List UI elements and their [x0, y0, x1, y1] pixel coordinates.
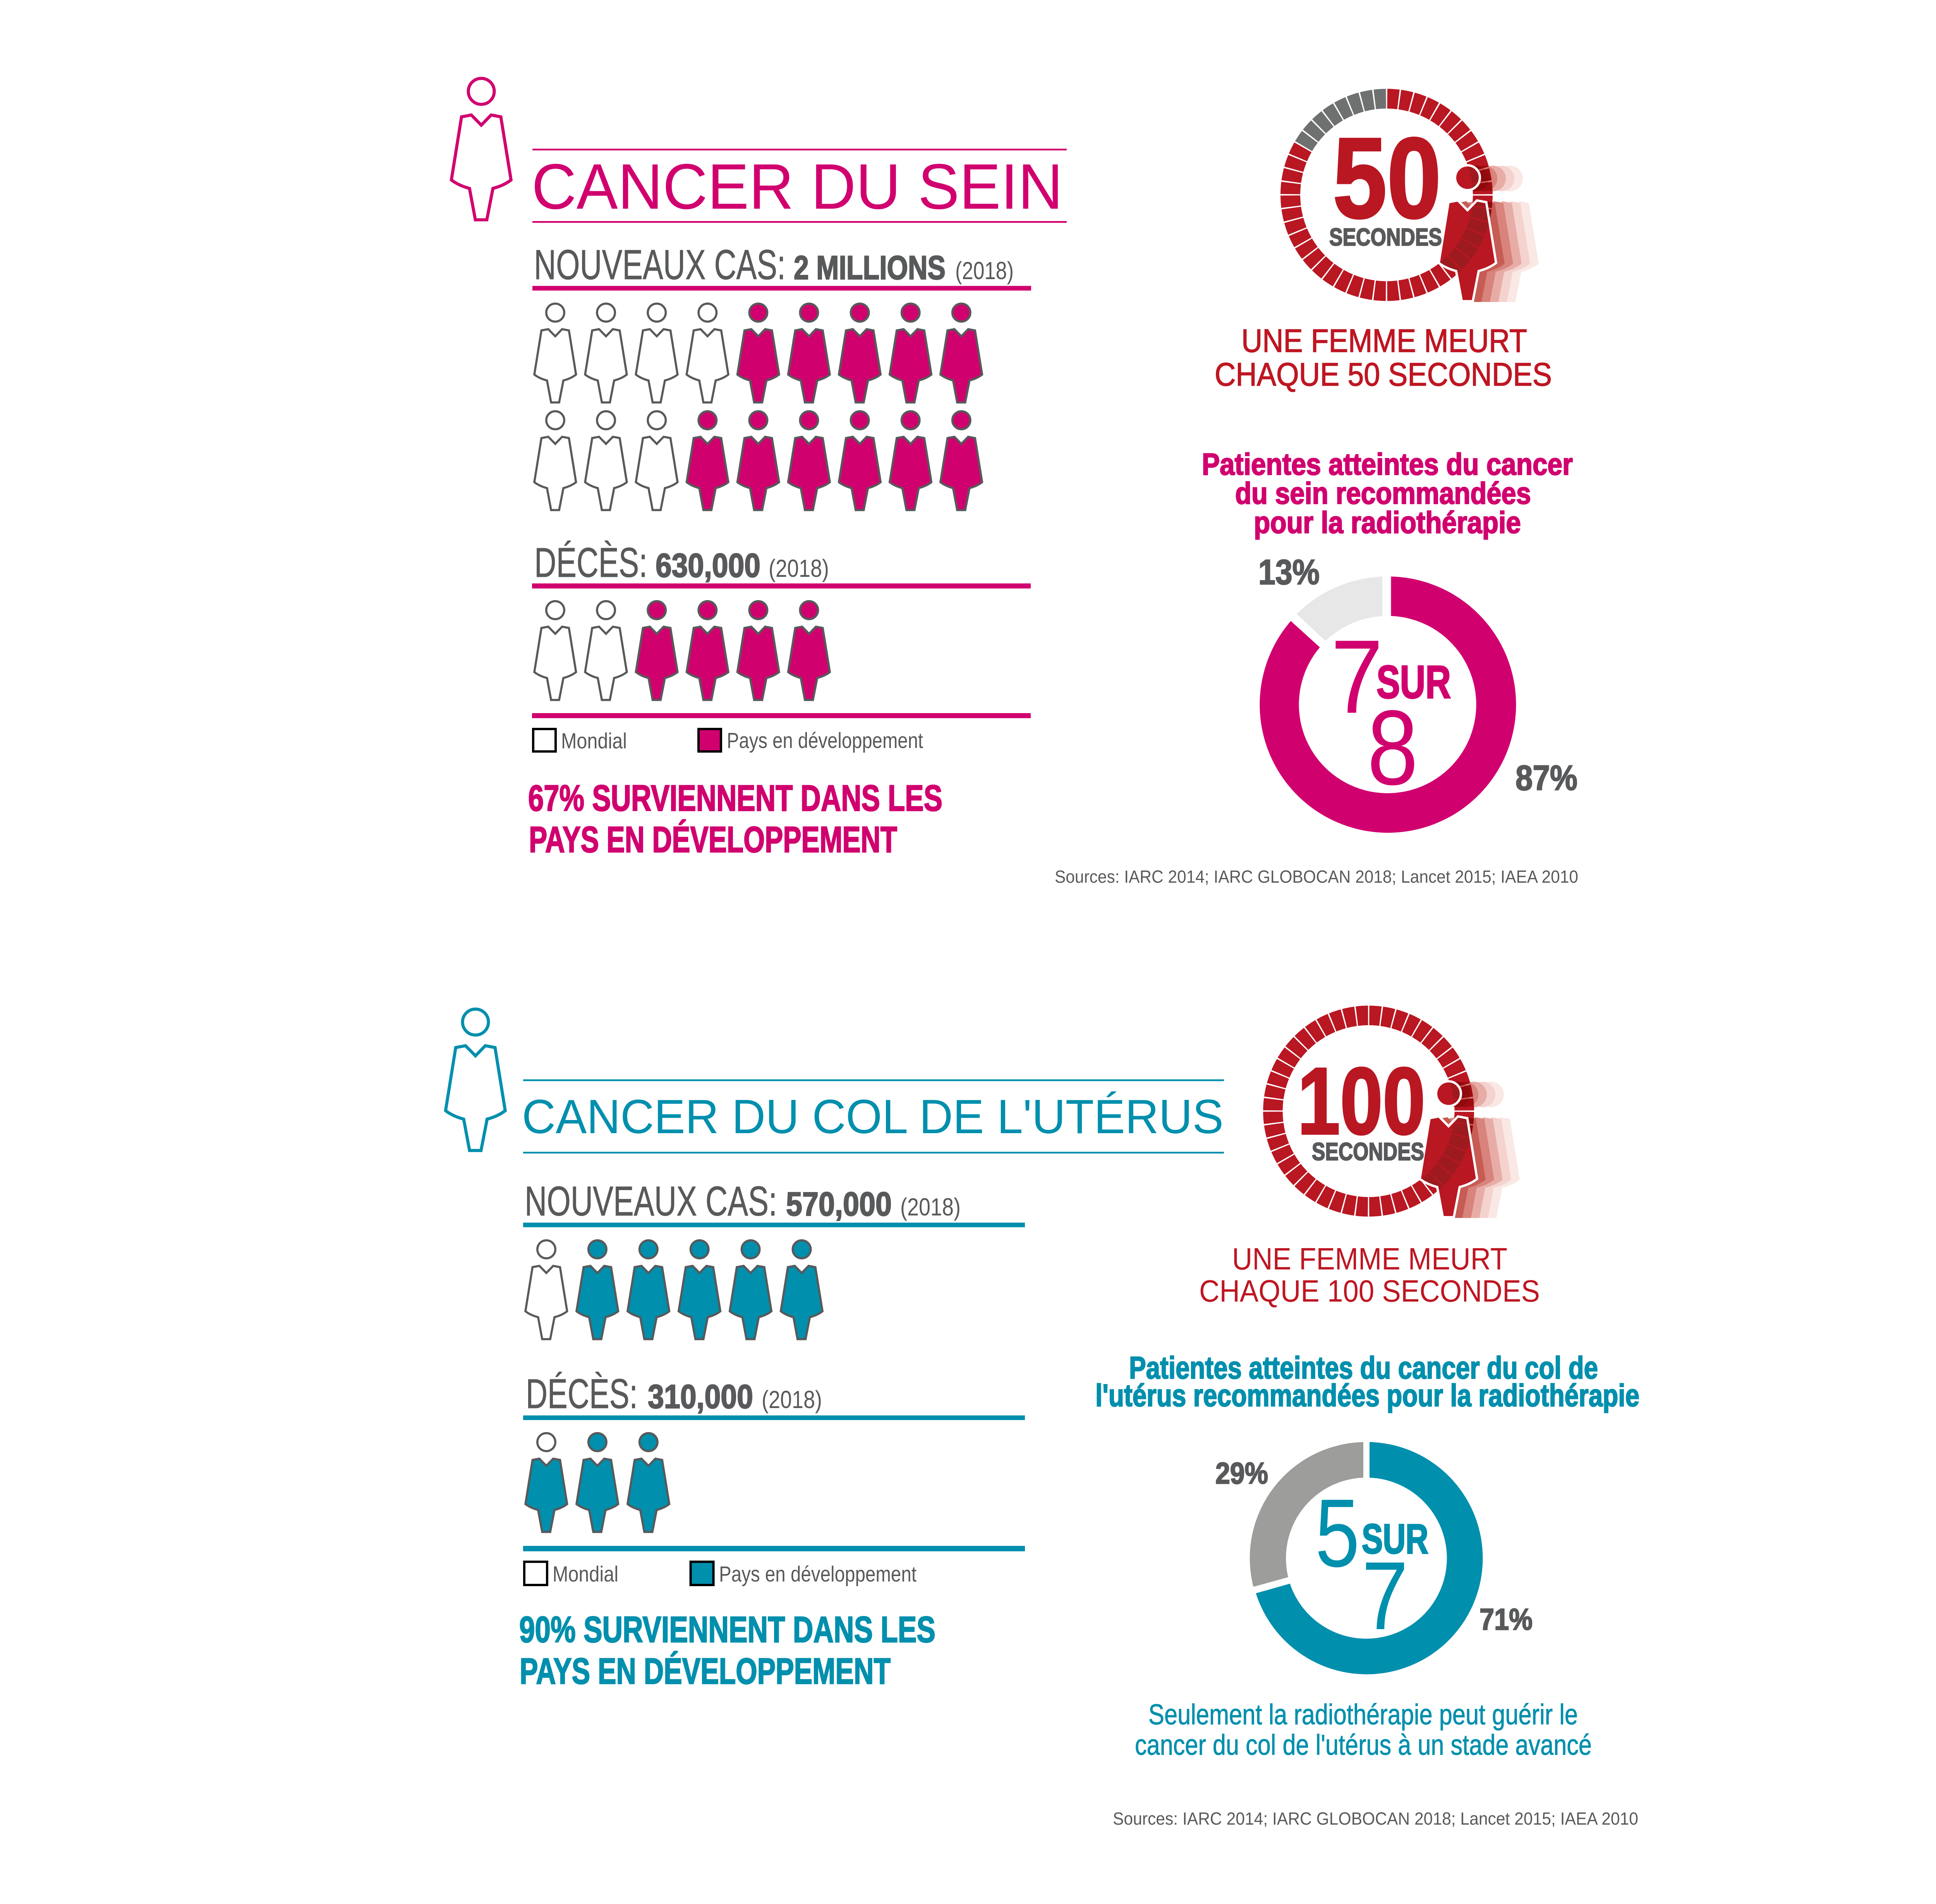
text: une femme meurt: UNE FEMME MEURT: [1241, 322, 1527, 359]
legend: Pays en développement: [719, 1562, 917, 1587]
callout: 67%: PAYS EN DÉVELOPPEMENT: [529, 819, 897, 860]
legend: Mondial: [561, 729, 627, 753]
heading: nouveaux cas: 570,000: [786, 1185, 892, 1223]
heading: patientes radiotherapie: [1095, 1350, 1639, 1413]
heading: patientes radiotherapie: l'utérus recommandées pour la radiothérapie: [1095, 1378, 1639, 1413]
donut chart: 71%: SUR: [1362, 1515, 1428, 1562]
heading: nouveaux cas: NOUVEAUX CAS:: [525, 1178, 777, 1224]
title: cancer du col: CANCER DU COL DE L'UTÉRUS: [522, 1090, 1224, 1144]
heading: patientes radiotherapie: pour la radiothérapie: [1254, 505, 1521, 540]
heading: nouveaux cas: (2018): [900, 1193, 961, 1221]
donut chart: 87%: 13%: [1258, 553, 1320, 592]
sources: Sources: IARC 2014; IARC GLOBOCAN 2018; Lancet 2015; IAEA 2010: [1055, 867, 1578, 887]
legend: [532, 713, 1031, 753]
donut chart: 87%: 8: [1367, 688, 1418, 807]
callout: 90%: [519, 1609, 935, 1692]
icon: 100 seconds clock: 100: [1298, 1048, 1425, 1154]
legend: Pays en développement: [727, 728, 923, 753]
heading: deces: 310,000: [648, 1378, 753, 1415]
pictogram row: new cases: [525, 1240, 822, 1339]
callout: 67%: 67% SURVIENNENT DANS LES: [528, 778, 942, 819]
text: une femme meurt: CHAQUE 100 SECONDES: [1199, 1274, 1540, 1308]
heading: nouveaux cas: [523, 1178, 1025, 1227]
pictogram row: deaths: [534, 601, 830, 700]
panel: cancer du sein: [451, 79, 1578, 887]
donut chart: 71%: 7: [1362, 1542, 1408, 1650]
icon: woman outline teal: [446, 1009, 505, 1151]
heading: patientes radiotherapie: Patientes atteintes du cancer du col de: [1129, 1350, 1598, 1385]
text: une femme meurt: UNE FEMME MEURT: [1232, 1242, 1507, 1276]
heading: deces: [523, 1370, 1025, 1420]
sources: Sources: IARC 2014; IARC GLOBOCAN 2018; Lancet 2015; IAEA 2010: [1113, 1809, 1638, 1829]
heading: deces: 630,000: [656, 547, 760, 584]
donut chart: 87%: SUR: [1376, 656, 1451, 708]
heading: deces: DÉCÈS:: [526, 1370, 638, 1417]
title: cancer du sein: CANCER DU SEIN: [532, 151, 1063, 223]
icon: 100 seconds clock: SECONDES: [1312, 1137, 1424, 1165]
heading: patientes radiotherapie: Patientes atteintes du cancer: [1202, 447, 1573, 481]
text: une femme meurt: [1215, 322, 1552, 393]
donut chart: 87%: 7: [1331, 619, 1383, 735]
heading: deces: (2018): [769, 554, 829, 582]
pictogram row: deaths: [525, 1433, 669, 1532]
donut chart: 71%: 5: [1315, 1479, 1360, 1587]
donut chart: 71%: [1215, 1442, 1533, 1674]
icon: 50 seconds clock: SECONDES: [1329, 224, 1442, 251]
icon: 50 seconds clock: [1290, 98, 1539, 302]
callout: 90%: 90% SURVIENNENT DANS LES: [519, 1609, 935, 1650]
heading: nouveaux cas: NOUVEAUX CAS:: [534, 241, 786, 288]
legend: Mondial: [553, 1562, 618, 1587]
donut chart: 71%: 71%: [1479, 1602, 1533, 1636]
text: une femme meurt: CHAQUE 50 SECONDES: [1215, 356, 1552, 393]
legend: [523, 1546, 1025, 1587]
heading: patientes radiotherapie: [1202, 447, 1573, 540]
heading: nouveaux cas: 2 MILLIONS: [794, 249, 946, 286]
heading: deces: DÉCÈS:: [534, 539, 647, 586]
text: seulement la radiotherapie: [1135, 1698, 1592, 1761]
text: seulement la radiotherapie: cancer du col de l'utérus à un stade avancé: [1135, 1729, 1592, 1761]
donut chart: 87%: [1258, 553, 1577, 833]
heading: deces: (2018): [762, 1386, 822, 1413]
pictogram grid: new cases: [534, 304, 982, 510]
donut chart: 71%: 29%: [1215, 1456, 1268, 1490]
callout: 90%: PAYS EN DÉVELOPPEMENT: [520, 1651, 891, 1692]
icon: woman outline pink: [451, 79, 511, 220]
heading: patientes radiotherapie: du sein recommandées: [1235, 476, 1531, 510]
callout: 67%: [528, 778, 942, 860]
text: seulement la radiotherapie: Seulement la radiothérapie peut guérir le: [1148, 1698, 1578, 1731]
icon: 100 seconds clock: [1272, 1015, 1520, 1218]
donut chart: 87%: 87%: [1516, 759, 1577, 798]
heading: nouveaux cas: (2018): [955, 257, 1014, 285]
heading: deces: [532, 539, 1031, 588]
heading: nouveaux cas: [532, 241, 1031, 290]
panel: cancer du col de l'uterus: [446, 1009, 1639, 1829]
icon: 50 seconds clock: 50: [1333, 114, 1441, 242]
text: une femme meurt: [1199, 1242, 1540, 1308]
